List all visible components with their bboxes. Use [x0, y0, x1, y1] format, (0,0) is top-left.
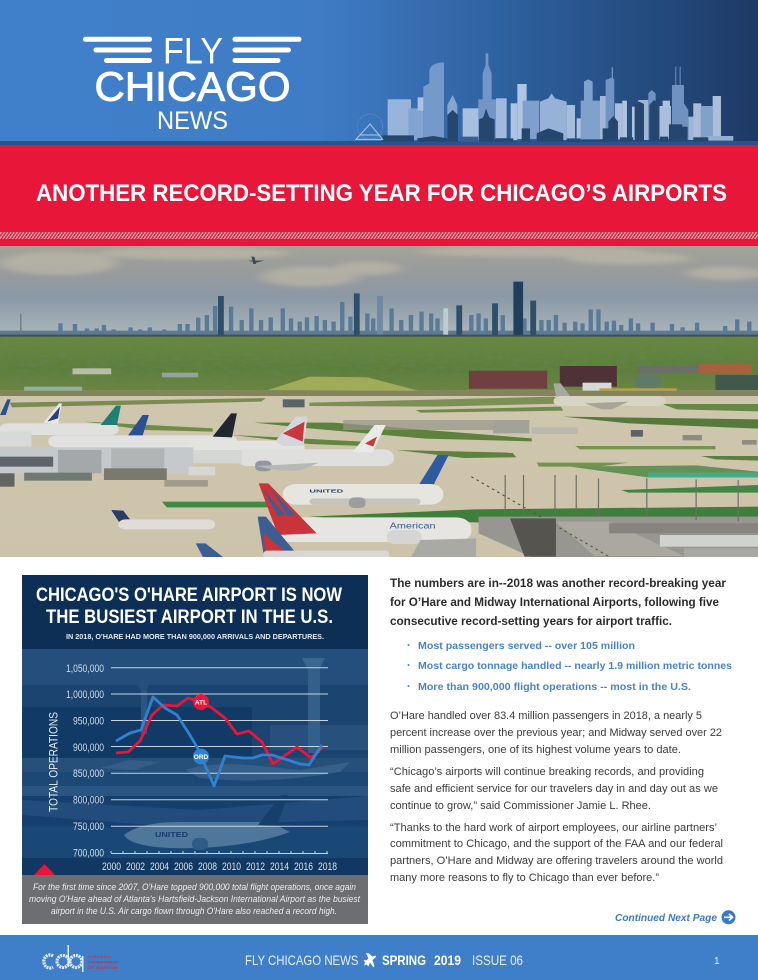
- y axis labels: 800,000: [73, 794, 104, 806]
- infographic panel: busiest airport: [22, 575, 368, 924]
- ATL marker: [193, 694, 209, 710]
- line chart: [48, 663, 337, 873]
- panel heading: CHICAGO'S O'HARE AIRPORT IS NOW: [36, 585, 342, 606]
- x axis labels: 2002: [126, 861, 145, 873]
- planes at terminal: [0, 399, 394, 471]
- x axis labels: 2004: [150, 861, 169, 873]
- x axis labels: 2012: [246, 861, 265, 873]
- article body: partners, O’Hare and Midway are offering travelers around the world: [390, 855, 723, 867]
- y axis labels: [66, 663, 104, 860]
- issue line: ISSUE 06: [472, 952, 523, 968]
- far taxiing plane: [554, 383, 666, 409]
- distant plane: [248, 257, 265, 264]
- x axis labels: 2006: [174, 861, 193, 873]
- caption: For the first time since 2007, O'Hare topped 900,000 total flight operations, once again: [33, 882, 356, 892]
- x axis labels: 2018: [318, 861, 337, 873]
- United plane: UNITED: [309, 489, 343, 494]
- American plane: American: [390, 522, 436, 531]
- grid lines: [111, 668, 328, 854]
- city skyline: [0, 282, 758, 337]
- foreground rooftop: [411, 475, 758, 557]
- red title banner: [0, 145, 758, 246]
- CDA logo: OF AVIATION: [88, 966, 118, 970]
- airfield ground: [0, 391, 758, 557]
- planes in scene: [100, 760, 350, 850]
- planes in scene: UNITED: [155, 832, 188, 839]
- y axis labels: 1,000,000: [66, 689, 104, 701]
- panel heading: THE BUSIEST AIRPORT IN THE U.S.: [46, 607, 333, 628]
- Fly Chicago News logo: NEWS: [157, 107, 228, 135]
- article intro: The numbers are in--2018 was another record-breaking year: [390, 578, 727, 590]
- x axis labels: [102, 861, 337, 873]
- Chicago skyline silhouette: [356, 53, 733, 142]
- tree line: [0, 337, 758, 392]
- grass strips: [10, 397, 758, 523]
- continued next page link: Continued Next Page: [615, 912, 717, 924]
- article body: “Thanks to the hard work of airport employees, our airline partners’: [390, 822, 717, 834]
- CDA logo: CHICAGO: [88, 955, 112, 959]
- control towers: [138, 658, 325, 753]
- brick buildings: [469, 371, 547, 389]
- article body: million passengers, one of its highest volume years to date.: [390, 744, 681, 756]
- y axis labels: 900,000: [73, 742, 104, 754]
- x axis labels: 2016: [294, 861, 313, 873]
- caption: moving O'Hare ahead of Atlanta's Hartsfield-Jackson International Airport as the busiest: [29, 894, 360, 904]
- caption: airport in the U.S. Air cargo flown through O'Hare also reached a record high.: [51, 906, 337, 916]
- y axis title: TOTAL OPERATIONS: [48, 712, 60, 812]
- Fly Chicago News logo: CHICAGO: [94, 64, 290, 110]
- x axis labels: 2008: [198, 861, 217, 873]
- issue line: 2019: [434, 952, 461, 968]
- article body: safe and efficient service for our travelers day in and day out as we: [390, 783, 718, 795]
- article body: “Chicago’s airports will continue breaking records, and providing: [390, 766, 704, 778]
- airport photograph: [0, 245, 758, 559]
- article body: [390, 710, 723, 884]
- plane icon: [364, 953, 376, 968]
- American plane: [196, 483, 471, 559]
- article body: commitment to Chicago, and the support of the FAA and our federal: [390, 838, 723, 850]
- issue line: FLY CHICAGO NEWS: [245, 952, 358, 968]
- y axis labels: 850,000: [73, 768, 104, 780]
- terminal building: [0, 432, 242, 487]
- United plane: [283, 455, 449, 508]
- article body: continue to grow,” said Commissioner Jamie L. Rhee.: [390, 800, 651, 812]
- chart background airport scene: [22, 649, 368, 875]
- article intro: for O’Hare and Midway International Airports, following five: [390, 597, 719, 609]
- y axis labels: 1,050,000: [66, 663, 104, 675]
- article intro: [390, 578, 727, 628]
- y axis labels: 750,000: [73, 821, 104, 833]
- article body: O’Hare handled over 83.4 million passengers in 2018, a nearly 5: [390, 710, 702, 722]
- issue line: SPRING: [382, 952, 426, 968]
- article intro: consecutive record-setting years for airport traffic.: [390, 616, 672, 628]
- service vehicles and building: [343, 420, 757, 445]
- ATL series line: [116, 698, 323, 764]
- key statistics bullets: More than 900,000 flight operations -- most in the U.S.: [418, 681, 691, 693]
- CDA logo: [44, 945, 120, 972]
- red triangle marker: [34, 864, 55, 875]
- key statistics bullets: Most passengers served -- over 105 million: [418, 640, 635, 652]
- x axis labels: 2000: [102, 861, 121, 873]
- issue line: [245, 952, 523, 968]
- caption: [22, 875, 368, 924]
- y axis labels: 950,000: [73, 716, 104, 728]
- key statistics bullets: [408, 640, 732, 693]
- x axis labels: 2010: [222, 861, 241, 873]
- ORD series line: [116, 697, 322, 786]
- ORD marker: [193, 748, 209, 764]
- regional jet: [111, 510, 215, 529]
- Fly Chicago News logo: FLY: [163, 30, 223, 72]
- CDA logo: DEPARTMENT: [88, 960, 120, 964]
- article body: percent increase over the previous year; and Midway served over 22: [390, 727, 722, 739]
- y axis labels: 700,000: [73, 848, 104, 860]
- panel heading: [22, 575, 368, 649]
- key statistics bullets: Most cargo tonnage handled -- nearly 1.9 million metric tonnes: [418, 660, 732, 672]
- footer bar: [0, 935, 758, 980]
- Fly Chicago News logo: [83, 30, 302, 135]
- header band: [0, 0, 758, 145]
- panel heading: IN 2018, O'HARE HAD MORE THAN 900,000 ARRIVALS AND DEPARTURES.: [66, 632, 324, 641]
- ATL marker: ATL: [195, 700, 207, 706]
- article body: many more reasons to fly to Chicago than ever before.”: [390, 872, 659, 884]
- ferris wheel: [356, 114, 383, 139]
- page number: 1: [714, 956, 720, 967]
- x axis labels: 2014: [270, 861, 289, 873]
- ORD marker: ORD: [194, 754, 209, 761]
